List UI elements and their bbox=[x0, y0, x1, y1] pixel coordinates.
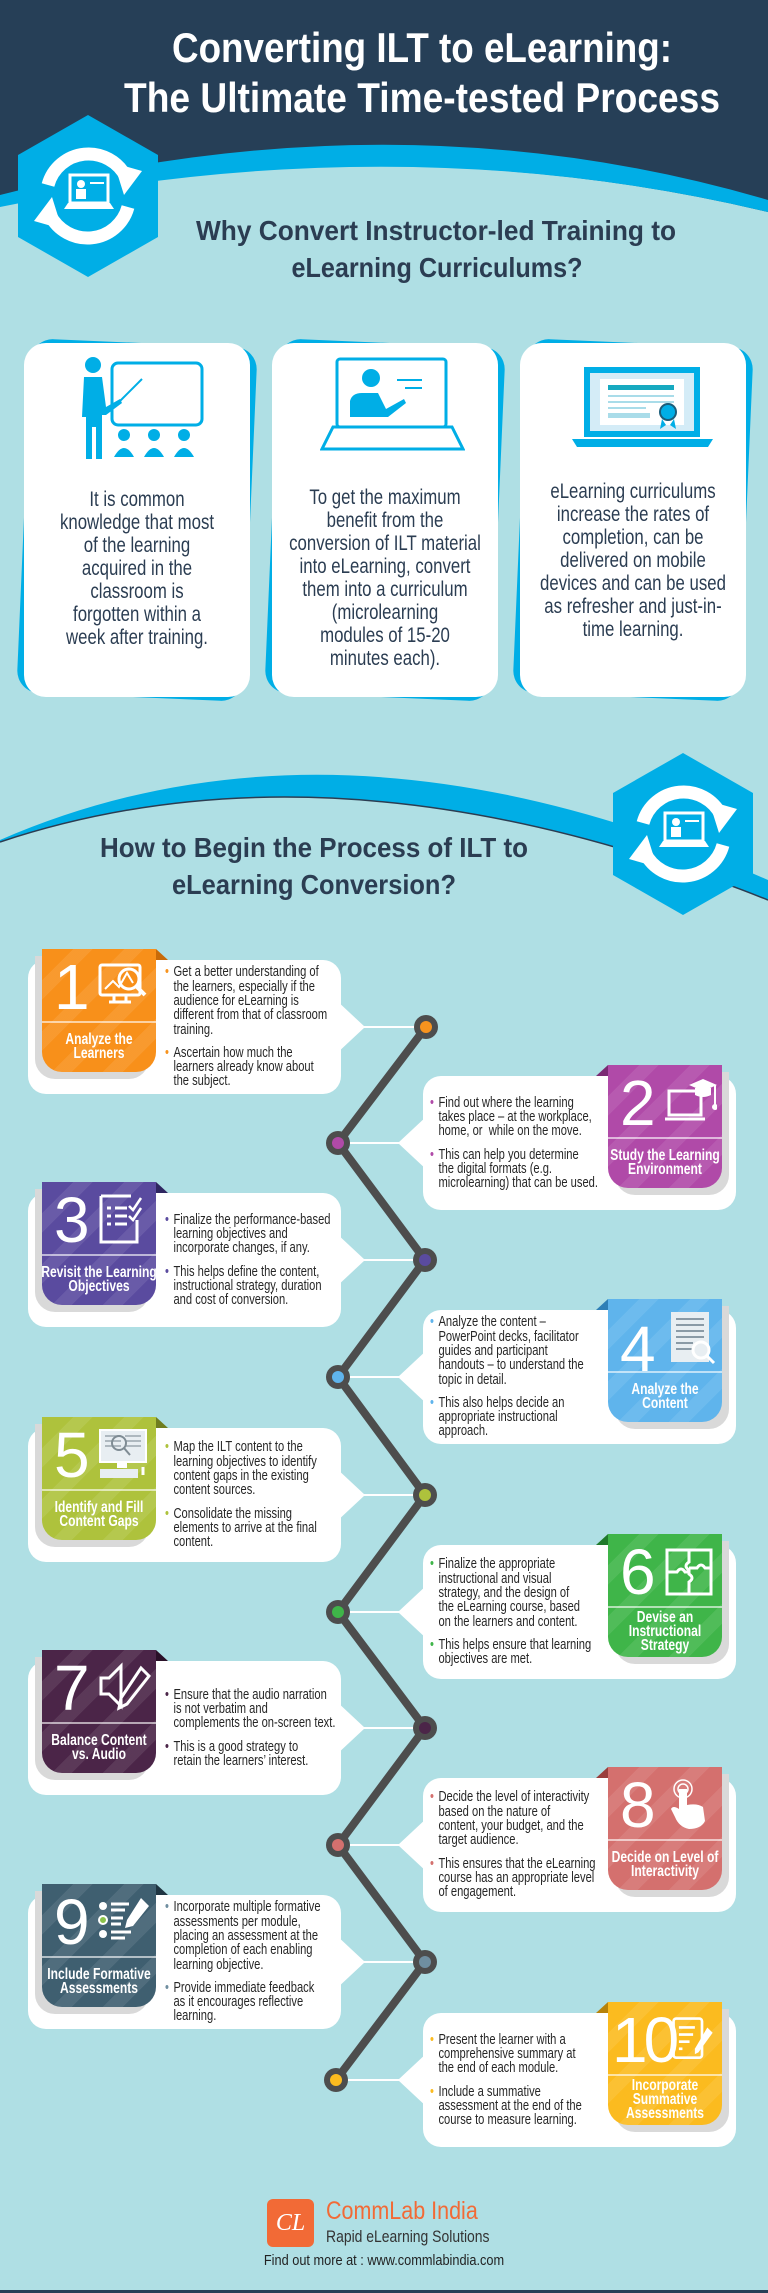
badge 1: Learners bbox=[73, 1045, 125, 1062]
badge 10: Summative bbox=[633, 2091, 697, 2108]
badge 8 bbox=[608, 1767, 722, 1890]
badge 6: Devise an bbox=[637, 1609, 693, 1626]
badge 2: Study the Learning bbox=[610, 1147, 720, 1164]
icon: list with pencil bbox=[98, 1898, 149, 1940]
heading: why convert: Why Convert Instructor-led Training to bbox=[196, 215, 676, 246]
text: step 10: the end of each module. bbox=[438, 2060, 558, 2076]
text: step 5: elements to arrive at the final bbox=[173, 1520, 317, 1536]
step 2 bbox=[399, 1065, 736, 1210]
badge 3 bbox=[42, 1182, 156, 1305]
icon: puzzle bbox=[666, 1548, 712, 1596]
badge 10: Assessments bbox=[626, 2105, 704, 2122]
text: card 1: knowledge that most bbox=[60, 511, 214, 534]
heading: why convert bbox=[196, 215, 676, 283]
step 6 bbox=[399, 1534, 736, 1679]
icon: laptop with certificate bbox=[572, 367, 713, 447]
badge 5: Identify and Fill bbox=[55, 1499, 143, 1516]
text: step 3: This helps define the content, bbox=[173, 1264, 319, 1280]
badge 5 bbox=[42, 1417, 156, 1540]
text: step 2 bbox=[430, 1095, 598, 1191]
text: card 1: It is common bbox=[89, 488, 185, 511]
text: step 4: appropriate instructional bbox=[438, 1409, 558, 1425]
text: step 6 bbox=[430, 1556, 591, 1667]
text: card 3: devices and can be used bbox=[540, 572, 726, 595]
text: step 9: Provide immediate feedback bbox=[173, 1980, 314, 1996]
badge 6: Strategy bbox=[641, 1637, 689, 1654]
text: step 7: This is a good strategy to bbox=[173, 1739, 298, 1755]
text: step 9: assessments per module, bbox=[173, 1914, 301, 1930]
text: card 2: minutes each). bbox=[330, 647, 440, 670]
text: step 9 bbox=[165, 1899, 321, 2024]
badge 9: 9 bbox=[54, 1886, 90, 1958]
text: card 1: of the learning bbox=[84, 534, 190, 557]
text: step 3: and cost of conversion. bbox=[173, 1292, 288, 1308]
text: step 6: This helps ensure that learning bbox=[438, 1637, 591, 1653]
badge 10 bbox=[608, 2002, 722, 2125]
badge 3: Objectives bbox=[68, 1278, 130, 1295]
text: card 1: acquired in the bbox=[82, 557, 192, 580]
badge 1 bbox=[42, 949, 156, 1072]
badge 5: Content Gaps bbox=[59, 1513, 139, 1530]
icon: teacher with students bbox=[82, 357, 204, 459]
text: card 1: classroom is bbox=[90, 580, 184, 603]
text: card 3: delivered on mobile bbox=[560, 549, 706, 572]
text: step 1: the learners, especially if the bbox=[173, 979, 315, 995]
step 10 bbox=[399, 2002, 736, 2147]
text: card 2: into eLearning, convert bbox=[300, 555, 470, 578]
text: step 3: incorporate changes, if any. bbox=[173, 1240, 310, 1256]
text: step 8: of engagement. bbox=[438, 1884, 516, 1900]
icon: monitor with magnifier bbox=[98, 964, 146, 1004]
text: card 2: modules of 15-20 bbox=[320, 624, 450, 647]
text: step 6: strategy, and the design of bbox=[438, 1585, 569, 1601]
icon: CL logo: CL bbox=[276, 2210, 305, 2236]
text: step 10 bbox=[430, 2032, 582, 2128]
panel: card 2 laptop bbox=[265, 339, 505, 701]
badge 4: Analyze the bbox=[631, 1381, 699, 1398]
icon: checklist bbox=[100, 1194, 142, 1244]
second swoosh bbox=[0, 774, 768, 901]
step 7 bbox=[28, 1650, 364, 1795]
text: brand: CommLab India bbox=[326, 2197, 478, 2225]
icon: hexagon refresh with laptop (process) bbox=[613, 753, 753, 915]
text: card 3 bbox=[540, 480, 726, 641]
text: step 2: This can help you determine bbox=[438, 1146, 579, 1162]
footer link text: Find out more at : www.commlabindia.com bbox=[264, 2252, 504, 2269]
badge 6: 6 bbox=[620, 1536, 656, 1608]
text: step 5: content. bbox=[173, 1534, 213, 1550]
text: step 8: target audience. bbox=[438, 1832, 519, 1848]
text: step 2: Find out where the learning bbox=[438, 1095, 574, 1111]
text: step 3: instructional strategy, duration bbox=[173, 1278, 322, 1294]
title: Converting ILT to eLearning: bbox=[172, 24, 672, 71]
text: card 2: benefit from the bbox=[327, 509, 443, 532]
badge 7 bbox=[42, 1650, 156, 1773]
badge 1: 1 bbox=[54, 951, 90, 1023]
badge 9: Include Formative bbox=[47, 1966, 151, 1983]
text: step 5: learning objectives to identify bbox=[173, 1454, 317, 1470]
badge 2: 2 bbox=[620, 1067, 656, 1139]
icon: CL logo bbox=[267, 2199, 314, 2247]
text: step 5: content gaps in the existing bbox=[173, 1468, 309, 1484]
text: step 4: approach. bbox=[438, 1423, 488, 1439]
text: step 1: the subject. bbox=[173, 1073, 231, 1089]
text: step 7: Ensure that the audio narration bbox=[173, 1687, 327, 1703]
badge 8: Interactivity bbox=[631, 1863, 699, 1880]
text: step 5: Map the ILT content to the bbox=[173, 1439, 303, 1455]
text: step 8: course has an appropriate level bbox=[438, 1870, 594, 1886]
text: step 2: the digital formats (e.g. bbox=[438, 1161, 552, 1177]
step 5 bbox=[28, 1417, 364, 1562]
header background and swoosh bbox=[0, 0, 768, 212]
text: step 1 bbox=[165, 964, 327, 1089]
badge 3: 3 bbox=[54, 1184, 90, 1256]
badge 4 bbox=[608, 1299, 722, 1422]
badge 9 bbox=[42, 1884, 156, 2007]
step 3 bbox=[28, 1182, 364, 1327]
text: card 1: week after training. bbox=[66, 626, 208, 649]
text: step 3 bbox=[165, 1212, 330, 1308]
text: step 5 bbox=[165, 1439, 317, 1550]
text: card 2 bbox=[289, 486, 481, 670]
icon: pointing hand bbox=[671, 1779, 705, 1829]
step 1 bbox=[28, 949, 364, 1094]
text: card 2: them into a curriculum bbox=[302, 578, 468, 601]
heading: how to begin bbox=[100, 832, 528, 900]
text: step 9: completion of each enabling bbox=[173, 1942, 313, 1958]
badge 6 bbox=[608, 1534, 722, 1657]
badge 10: 10 bbox=[612, 2004, 675, 2076]
badge 2: Environment bbox=[628, 1161, 702, 1178]
text: card 1 bbox=[60, 488, 214, 649]
step 8 bbox=[399, 1767, 736, 1912]
panel: card 1 classroom bbox=[17, 339, 257, 701]
text: step 8: Decide the level of interactivity bbox=[438, 1789, 589, 1805]
text: step 10: Present the learner with a bbox=[438, 2032, 566, 2048]
badge 7: vs. Audio bbox=[72, 1746, 126, 1763]
text: step 9: placing an assessment at the bbox=[173, 1928, 318, 1944]
footer logo bbox=[267, 2197, 490, 2247]
icon: laptop with presenter bbox=[320, 358, 465, 450]
text: step 1: different from that of classroom bbox=[173, 1007, 327, 1023]
text: step 9: Incorporate multiple formative bbox=[173, 1899, 321, 1915]
text: step 6: instructional and visual bbox=[438, 1571, 551, 1587]
text: step 4 bbox=[430, 1314, 584, 1439]
text: step 8: content, your budget, and the bbox=[438, 1818, 584, 1834]
text: step 6: objectives are met. bbox=[438, 1651, 532, 1667]
icon: computer with book bbox=[99, 1429, 147, 1478]
text: card 2: To get the maximum bbox=[309, 486, 461, 509]
text: card 3: time learning. bbox=[583, 618, 683, 641]
badge 2 bbox=[608, 1065, 722, 1188]
text: step 6: the eLearning course, based bbox=[438, 1599, 580, 1615]
badge 10: Incorporate bbox=[632, 2077, 698, 2094]
badge 4: Content bbox=[642, 1395, 688, 1412]
text: card 1: forgotten within a bbox=[73, 603, 201, 626]
text: step 4: Analyze the content – bbox=[438, 1314, 546, 1330]
text: step 8: based on the nature of bbox=[438, 1804, 550, 1820]
text: step 9: as it encourages reflective bbox=[173, 1994, 303, 2010]
text: card 3: eLearning curriculums bbox=[550, 480, 716, 503]
text: step 9: learning objective. bbox=[173, 1956, 263, 1972]
text: step 10: course to measure learning. bbox=[438, 2112, 577, 2128]
step 4 bbox=[399, 1299, 736, 1444]
footer logo: Rapid eLearning Solutions bbox=[326, 2227, 490, 2246]
icon: hexagon refresh with laptop (top) bbox=[18, 115, 158, 277]
text: step 9: learning. bbox=[173, 2008, 216, 2024]
text: step 4: handouts – to understand the bbox=[438, 1357, 584, 1373]
text: step 10: comprehensive summary at bbox=[438, 2046, 576, 2062]
text: step 7: complements the on-screen text. bbox=[173, 1715, 335, 1731]
icon: document with magnifier bbox=[671, 1312, 715, 1364]
text: card 2: conversion of ILT material bbox=[289, 532, 481, 555]
panel: card 3 certificate bbox=[513, 339, 753, 701]
badge 7: 7 bbox=[54, 1652, 90, 1724]
badge 4: 4 bbox=[620, 1313, 656, 1385]
text: step 1: training. bbox=[173, 1022, 213, 1038]
text: step 5: content sources. bbox=[173, 1482, 255, 1498]
text: step 5: Consolidate the missing bbox=[173, 1506, 292, 1522]
badge 5: 5 bbox=[54, 1419, 90, 1491]
bottom strip bbox=[0, 2290, 768, 2293]
text: step 4: guides and participant bbox=[438, 1343, 548, 1359]
heading: how to begin: eLearning Conversion? bbox=[172, 869, 456, 900]
text: step 4: topic in detail. bbox=[438, 1372, 507, 1388]
text: step 8 bbox=[430, 1789, 596, 1900]
step 9 bbox=[28, 1884, 364, 2029]
text: step 4: PowerPoint decks, facilitator bbox=[438, 1329, 579, 1345]
badge 7: Balance Content bbox=[51, 1732, 147, 1749]
icon: document with pencil bbox=[672, 2017, 713, 2059]
text: step 7 bbox=[165, 1687, 335, 1769]
title bbox=[124, 24, 720, 121]
text: step 1: Get a better understanding of bbox=[173, 964, 319, 980]
text: step 7: is not verbatim and bbox=[173, 1701, 268, 1717]
text: step 6: on the learners and content. bbox=[438, 1614, 578, 1630]
heading: why convert: eLearning Curriculums? bbox=[292, 252, 582, 283]
text: card 2: (microlearning bbox=[332, 601, 438, 624]
text: step 10: assessment at the end of the bbox=[438, 2098, 582, 2114]
text: card 3: completion, can be bbox=[562, 526, 704, 549]
icon: speaker with pencil bbox=[100, 1662, 151, 1711]
icon: laptop with cap bbox=[665, 1079, 717, 1120]
text: step 1: audience for eLearning is bbox=[173, 993, 299, 1009]
text: step 8: This ensures that the eLearning bbox=[438, 1856, 596, 1872]
badge 1: Analyze the bbox=[65, 1031, 133, 1048]
text: card 3: as refresher and just-in- bbox=[544, 595, 722, 618]
badge 9: Assessments bbox=[60, 1980, 138, 1997]
text: step 4: This also helps decide an bbox=[438, 1395, 564, 1411]
text: step 2: microlearning) that can be used. bbox=[438, 1175, 598, 1191]
badge 3: Revisit the Learning bbox=[42, 1264, 156, 1281]
text: step 2: takes place – at the workplace, bbox=[438, 1109, 592, 1125]
badge 8: Decide on Level of bbox=[612, 1849, 718, 1866]
text: card 3: increase the rates of bbox=[557, 503, 709, 526]
text: step 6: Finalize the appropriate bbox=[438, 1556, 555, 1572]
text: step 7: retain the learners’ interest. bbox=[173, 1753, 308, 1769]
text: step 1: Ascertain how much the bbox=[173, 1045, 293, 1061]
badge 6: Instructional bbox=[629, 1623, 701, 1640]
text: step 10: Include a summative bbox=[438, 2084, 541, 2100]
text: step 3: Finalize the performance-based bbox=[173, 1212, 330, 1228]
text: step 3: learning objectives and bbox=[173, 1226, 288, 1242]
badge 8: 8 bbox=[620, 1769, 656, 1841]
text: step 1: learners already know about bbox=[173, 1059, 314, 1075]
heading: how to begin: How to Begin the Process of ILT to bbox=[100, 832, 528, 863]
text: step 2: home, or while on the move. bbox=[438, 1123, 582, 1139]
